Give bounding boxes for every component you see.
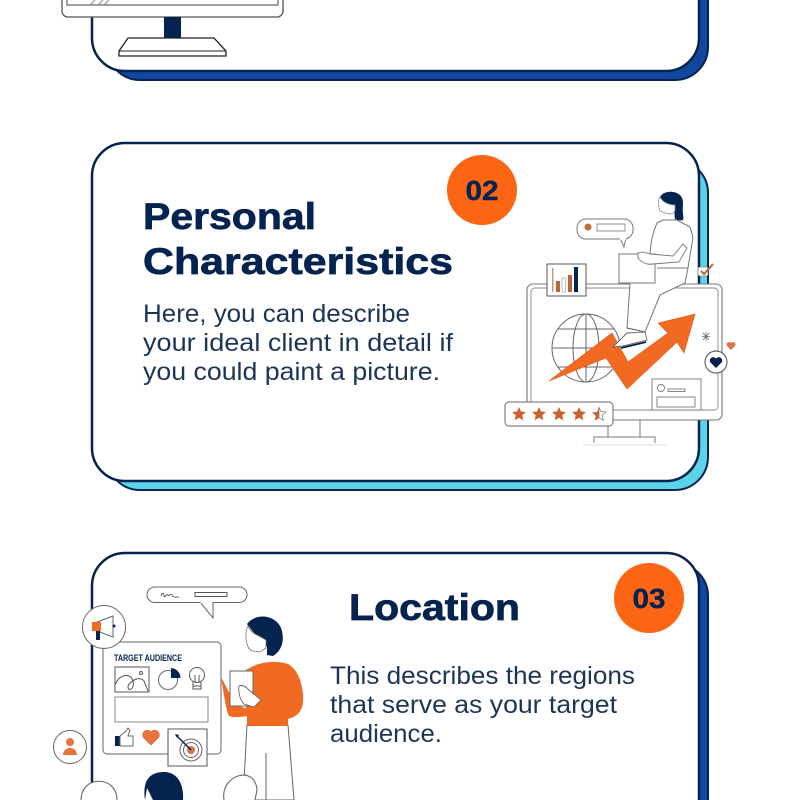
icon: thumbs up [115,728,133,746]
icon: monitor [527,284,722,445]
badge: 02 [447,155,517,225]
label: TARGET AUDIENCE: TARGET AUDIENCE [114,653,182,664]
icon: small orange heart [727,342,736,350]
text block: personal characteristics description: Here, you can describe [143,300,410,328]
icon: megaphone badge [82,606,126,648]
text block: personal characteristics description: your ideal client in detail if [143,329,453,357]
icon: light bulb [190,668,204,689]
heading: Personal Characteristics: Characteristics [143,241,453,282]
icon: small form card [652,379,701,410]
icon: heart [143,730,159,745]
icon: heart badge [705,351,727,373]
icon: presenter [221,617,303,800]
icon: globe [552,314,620,382]
icon: orange growth arrow [549,314,695,389]
icon: check badge [698,264,713,276]
icon: monitor stand [62,0,283,56]
icon: seated person [613,192,693,348]
text block: location description: that serve as your target [330,691,617,719]
badge: 02: 02 [466,175,498,206]
badge: 03: 03 [632,583,666,614]
text block: personal characteristics description: you could paint a picture. [143,358,440,386]
icon: sparkle [702,332,710,341]
heading: Personal Characteristics [143,196,453,282]
icon: image placeholder [115,667,149,692]
text block: personal characteristics description [143,300,453,386]
icon: target card [168,729,207,766]
icon: bar chart card [547,264,586,296]
text field [115,697,208,722]
heading: Location: Location [349,587,520,628]
icon: speech bubble [577,219,633,247]
panel: card 02 [92,143,736,490]
illustration: person on monitor with growth arrow [505,192,736,445]
illustration: presenter with target audience board [54,587,303,800]
text block: location description [330,662,635,748]
icon: person badge [54,730,86,764]
text block: location description: This describes the regions [330,662,635,690]
panel: target audience board [103,642,221,766]
panel: card 01 [62,0,708,80]
icon: speech bubble [147,587,247,618]
heading: Personal Characteristics: Personal [143,196,316,237]
badge: 03 [614,563,684,633]
icon: star rating card [505,402,613,426]
icon: pie chart [158,668,180,690]
icon: audience heads [81,772,257,800]
panel: card 03 [54,553,708,800]
text block: location description: audience. [330,720,442,748]
